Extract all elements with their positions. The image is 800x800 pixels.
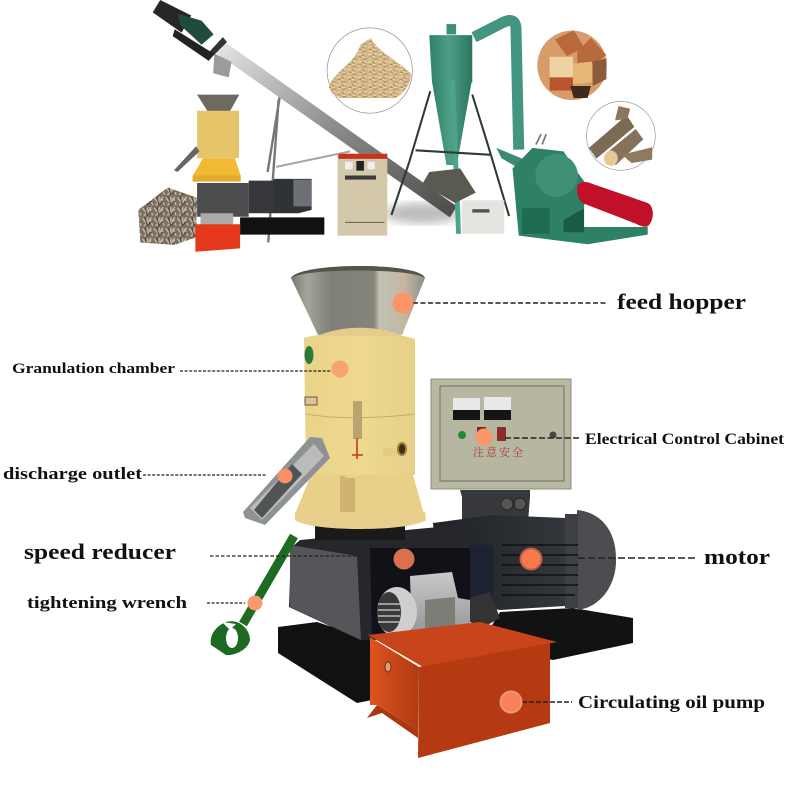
granulation chamber body: [295, 332, 426, 529]
label: electrical control cabinet: Electrical Control Cabinet: [585, 431, 785, 448]
auger support legs: [268, 91, 350, 243]
label: speed reducer: speed reducer: [24, 539, 176, 564]
tightening wrench: [211, 536, 294, 655]
cabinet warning text: 注意安全: [473, 445, 525, 459]
blower and discharge: [422, 169, 476, 203]
sawdust circle: [327, 28, 412, 113]
auger tube: [206, 37, 457, 217]
discharge outlet: [243, 437, 330, 525]
label: feed hopper: feed hopper: [617, 289, 746, 314]
pellet pile: [138, 187, 197, 245]
wood blocks circle: [537, 30, 607, 100]
base frame: [278, 608, 633, 703]
white electric box: [462, 200, 504, 234]
feed hopper: [291, 266, 425, 336]
marker dots: [248, 292, 542, 712]
oil tank: [367, 622, 557, 758]
top product line photo: [138, 0, 655, 252]
mini pellet mill: [174, 95, 324, 252]
wood crusher: [496, 134, 653, 244]
label: motor: motor: [704, 544, 770, 569]
auger drive motor: [153, 0, 214, 61]
logs circle: [586, 101, 655, 170]
motor: [433, 490, 616, 610]
label: circulating oil pump: Circulating oil pump: [578, 692, 765, 712]
cyclone separator: [391, 21, 519, 234]
floor shadow: [385, 203, 460, 224]
speed reducer: [289, 525, 493, 640]
control cabinet: [337, 154, 387, 236]
control cabinet: [431, 379, 571, 489]
label: discharge outlet: discharge outlet: [3, 464, 142, 483]
oil pump motor: [377, 572, 500, 651]
label: tightening wrench: tightening wrench: [27, 593, 188, 612]
main machine illustration: [211, 266, 633, 758]
label: granulation chamber: Granulation chamber: [12, 361, 175, 377]
leader lines: [143, 303, 695, 702]
